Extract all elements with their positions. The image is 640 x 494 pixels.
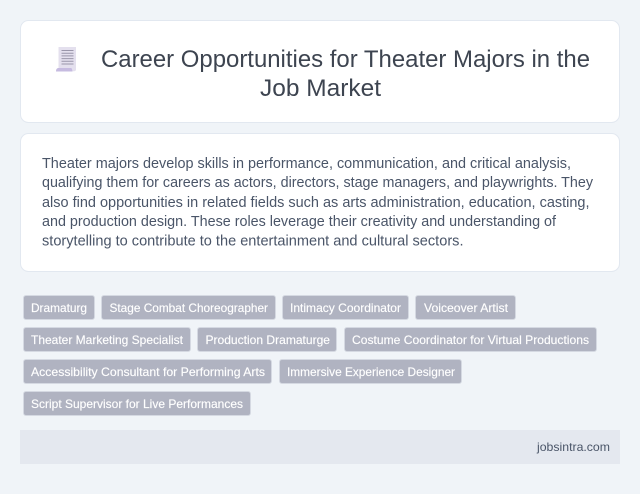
icon: script document (56, 47, 76, 72)
title: Career Opportunities for Theater Majors in the (101, 46, 590, 73)
footer: jobsintra.com (536, 440, 610, 454)
tag: Immersive Experience Designer: Immersive Experience Designer (287, 365, 455, 379)
panel: description (20, 134, 620, 272)
tag: Dramaturg: Dramaturg (31, 301, 87, 315)
text block: description (42, 156, 594, 250)
tag: Script Supervisor for Live Performances: Script Supervisor for Live Performances (31, 397, 243, 411)
text block: description: qualifying them for careers as actors, directors, stage managers, and playwrights. They (42, 175, 594, 191)
tag: Stage Combat Choreographer: Stage Combat Choreographer (110, 301, 268, 315)
tag: Intimacy Coordinator (282, 296, 408, 320)
tag: Production Dramaturge: Production Dramaturge (206, 333, 330, 347)
title (101, 46, 590, 102)
tag: Theater Marketing Specialist (24, 328, 190, 352)
tag: Theater Marketing Specialist: Theater Marketing Specialist (31, 333, 184, 347)
tag: Accessibility Consultant for Performing Arts: Accessibility Consultant for Performing Arts (31, 365, 265, 379)
title: Job Market (260, 75, 381, 102)
tag: Dramaturg (24, 296, 94, 320)
footer (20, 430, 620, 464)
tag: Accessibility Consultant for Performing Arts (24, 360, 272, 384)
tag: Costume Coordinator for Virtual Productions: Costume Coordinator for Virtual Productions (352, 333, 589, 347)
tag: Production Dramaturge (198, 328, 336, 352)
panel: header (20, 20, 620, 122)
tag: Immersive Experience Designer (280, 360, 462, 384)
text block: description: storytelling to contribute to the entertainment and cultural sectors. (42, 234, 464, 250)
tag: Voiceover Artist: Voiceover Artist (424, 301, 509, 315)
tag: Voiceover Artist (416, 296, 516, 320)
tag: Costume Coordinator for Virtual Productions (344, 328, 596, 352)
tag: Script Supervisor for Live Performances (24, 392, 250, 416)
tag: Intimacy Coordinator: Intimacy Coordinator (290, 301, 401, 315)
text block: description: Theater majors develop skills in performance, communication, and critical analysis, (42, 156, 571, 172)
text block: description: and production design. These roles leverage their creativity and understanding of (42, 214, 557, 230)
text block: description: also find opportunities in related fields such as arts administration, education, casting, (42, 195, 590, 211)
tag: Stage Combat Choreographer (102, 296, 276, 320)
tag list (24, 296, 596, 416)
